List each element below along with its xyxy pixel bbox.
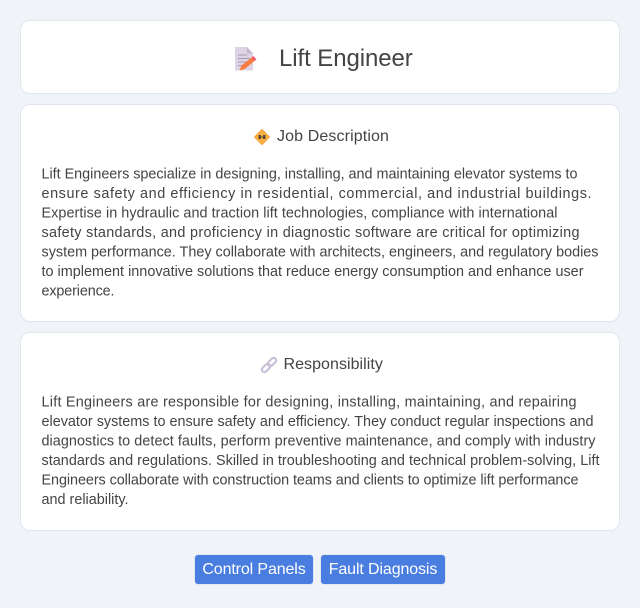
title: Lift Engineer <box>279 45 413 72</box>
text block: job description: to implement innovative solutions that reduce energy consumption and enhance user <box>42 264 584 280</box>
text block: job description: Expertise in hydraulic and traction lift technologies, compliance with international <box>42 206 558 222</box>
panel: responsibility <box>20 332 620 531</box>
text block: job description: safety standards, and proficiency in diagnostic software are critical for optimizing <box>42 225 580 241</box>
text block: job description: system performance. They collaborate with architects, engineers, and regulatory bodies <box>42 244 598 260</box>
text block: responsibility: Engineers collaborate with construction teams and clients to optimize lift performance <box>42 472 578 488</box>
icon: chain link <box>260 356 278 374</box>
panel: job description <box>20 104 620 322</box>
text block: job description: Lift Engineers specialize in designing, installing, and maintaining elevator systems to <box>42 166 578 182</box>
text block: job description: ensure safety and efficiency in residential, commercial, and industrial buildings. <box>42 186 592 202</box>
tag: fault diagnosis <box>321 555 445 584</box>
icon: road sign <box>254 128 270 146</box>
tag: control panels <box>195 555 313 584</box>
panel: title header <box>20 20 620 94</box>
icon: document with pencil <box>235 47 256 70</box>
text block: responsibility: diagnostics to detect faults, perform preventive maintenance, and comply with industry <box>42 434 596 450</box>
text block: responsibility: Lift Engineers are responsible for designing, installing, maintaining, and repairing <box>42 394 576 410</box>
text block: responsibility: standards and regulations. Skilled in troubleshooting and technical problem-solving, Lift <box>42 453 600 469</box>
tag: control panels: Control Panels <box>202 561 306 578</box>
text block: responsibility: elevator systems to ensure safety and efficiency. They conduct regular inspections and <box>42 414 594 430</box>
text block: responsibility: and reliability. <box>42 492 128 508</box>
tag: fault diagnosis: Fault Diagnosis <box>329 561 437 578</box>
text block: job description <box>42 166 598 300</box>
text block: job description: experience. <box>42 284 114 300</box>
text block: responsibility <box>42 394 600 508</box>
heading: job description: Job Description <box>277 128 389 145</box>
heading: responsibility: Responsibility <box>284 356 383 373</box>
